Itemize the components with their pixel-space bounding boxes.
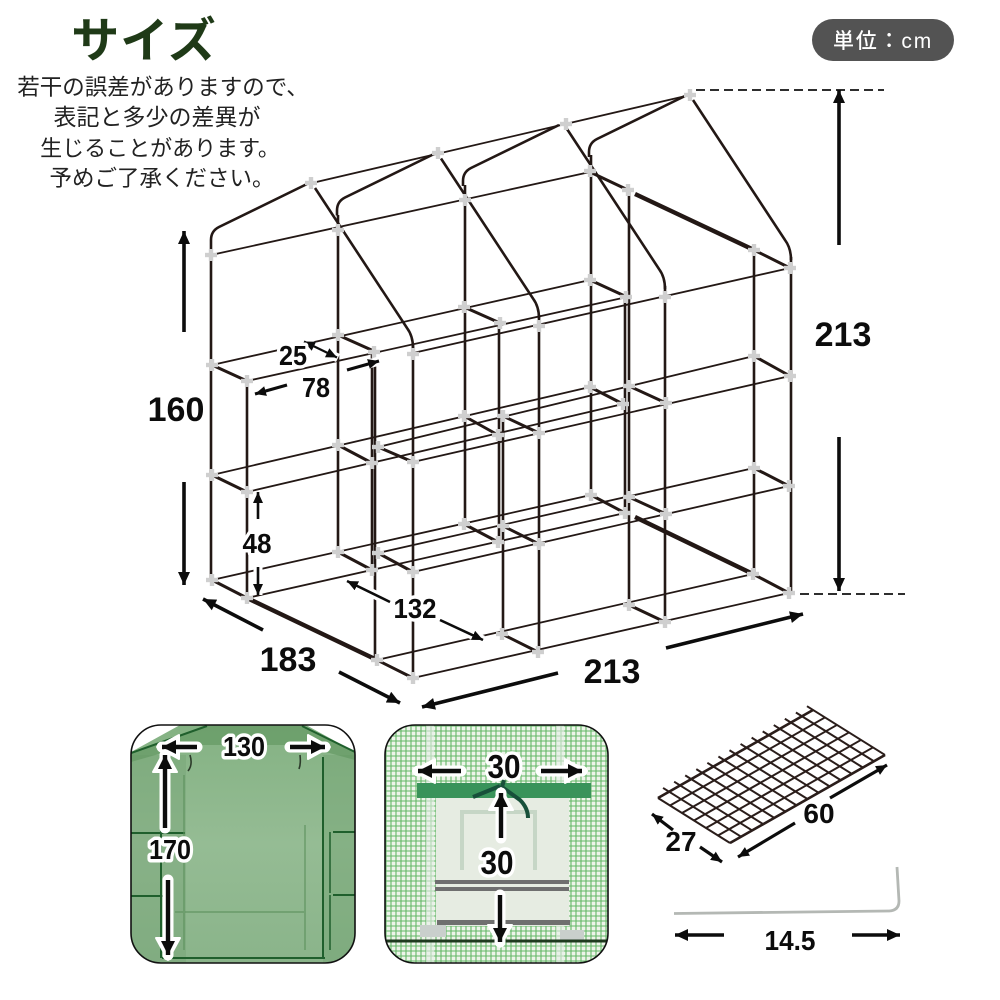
greenhouse frame diagram <box>205 89 796 684</box>
green roll band <box>417 783 591 798</box>
dimension: shelf depth 25: 25 <box>279 340 307 371</box>
note text: 生じることがあります。 <box>40 136 280 161</box>
cross beams <box>212 172 790 678</box>
dimension: shelf 27: 27 <box>665 826 697 857</box>
unit badge: 単位：cm <box>833 30 933 53</box>
dashed height guides <box>696 90 905 594</box>
dimension: shelf depth 25 <box>279 340 338 371</box>
dimension: shelf 60 <box>738 765 887 857</box>
dimension: side height 160: 160 <box>148 391 204 429</box>
dimension: shelf 60: 60 <box>803 798 835 829</box>
dimension: shelf width 78: 78 <box>302 372 330 403</box>
dimension: shelf width 78 <box>255 361 379 403</box>
tape pieces <box>420 925 446 937</box>
dimension: window 30 wide: 30 <box>488 748 520 785</box>
dimension: inner 132: 132 <box>394 593 436 624</box>
note text <box>17 75 309 191</box>
unit badge <box>812 19 954 61</box>
white corners <box>131 725 355 752</box>
window panel <box>436 796 569 926</box>
door hooks <box>188 755 300 771</box>
dimension: peg 14.5: 14.5 <box>764 925 816 956</box>
dimension: shelf spacing 48: 48 <box>242 528 272 559</box>
photo: door interior <box>131 725 355 963</box>
frame posts <box>211 155 791 678</box>
thick end beams <box>247 194 754 660</box>
dimension: window 30 high: 30 <box>480 844 514 881</box>
dimension: door 170: 170 <box>149 834 191 865</box>
pale vertical seams <box>430 725 560 963</box>
frame joints <box>205 89 796 684</box>
dimension: door 130: 130 <box>223 731 265 762</box>
lengthwise rails <box>211 95 790 678</box>
dimension: width 213 <box>422 614 803 707</box>
roof and side shading <box>131 725 355 963</box>
dimension: inner 132 <box>347 581 483 640</box>
bottom pipe <box>385 940 608 942</box>
dimension: width 213: 213 <box>584 653 640 691</box>
frame lines <box>131 726 355 958</box>
dimension: shelf spacing 48 <box>242 492 272 595</box>
ties <box>473 780 528 818</box>
wire shelf <box>652 706 885 843</box>
ground peg <box>674 867 899 914</box>
dimension: depth 183 <box>203 599 400 703</box>
note text: 予めご了承ください。 <box>49 166 275 191</box>
dimension: depth 183: 183 <box>260 641 316 679</box>
note text: 表記と多少の差異が <box>54 104 260 130</box>
dimension: total height 213: 213 <box>815 316 871 354</box>
dimension: shelf 27 <box>652 814 722 862</box>
title: サイズ <box>71 15 217 68</box>
grey bars <box>435 880 570 925</box>
photo: mesh window <box>385 725 608 963</box>
frame arches <box>211 96 791 348</box>
inner door reflection <box>462 812 535 870</box>
note text: 若干の誤差がありますので、 <box>17 75 309 100</box>
